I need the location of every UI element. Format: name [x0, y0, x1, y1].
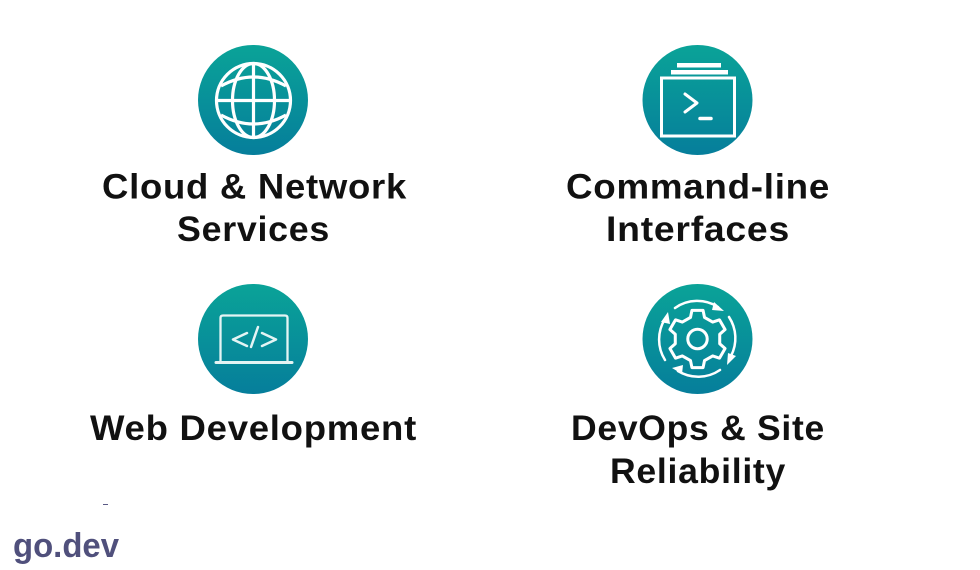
heading: web development: Web Development: [90, 409, 417, 448]
panel: web development: [90, 284, 417, 448]
heading: devops and site reliability: DevOps & Site: [571, 409, 825, 448]
heading: command-line interfaces: Command-line: [566, 168, 830, 206]
panel: devops and site reliability: [571, 284, 825, 491]
tick mark: [103, 504, 108, 505]
footer: go.dev: go.dev: [13, 527, 119, 565]
heading: devops and site reliability: Reliability: [610, 452, 786, 491]
panel: cloud and network services: [102, 45, 407, 249]
icon: laptop with code: [198, 284, 308, 394]
heading: command-line interfaces: [566, 168, 830, 249]
heading: cloud and network services: Services: [177, 210, 330, 249]
heading: cloud and network services: [102, 168, 407, 249]
heading: command-line interfaces: Interfaces: [606, 210, 790, 249]
icon: gear with cycle arrows: [642, 284, 752, 394]
heading: cloud and network services: Cloud & Network: [102, 168, 407, 206]
icon: terminal windows: [642, 45, 752, 155]
icon: globe: [198, 45, 308, 155]
panel: command-line interfaces: [566, 45, 830, 249]
heading: devops and site reliability: [571, 409, 825, 491]
